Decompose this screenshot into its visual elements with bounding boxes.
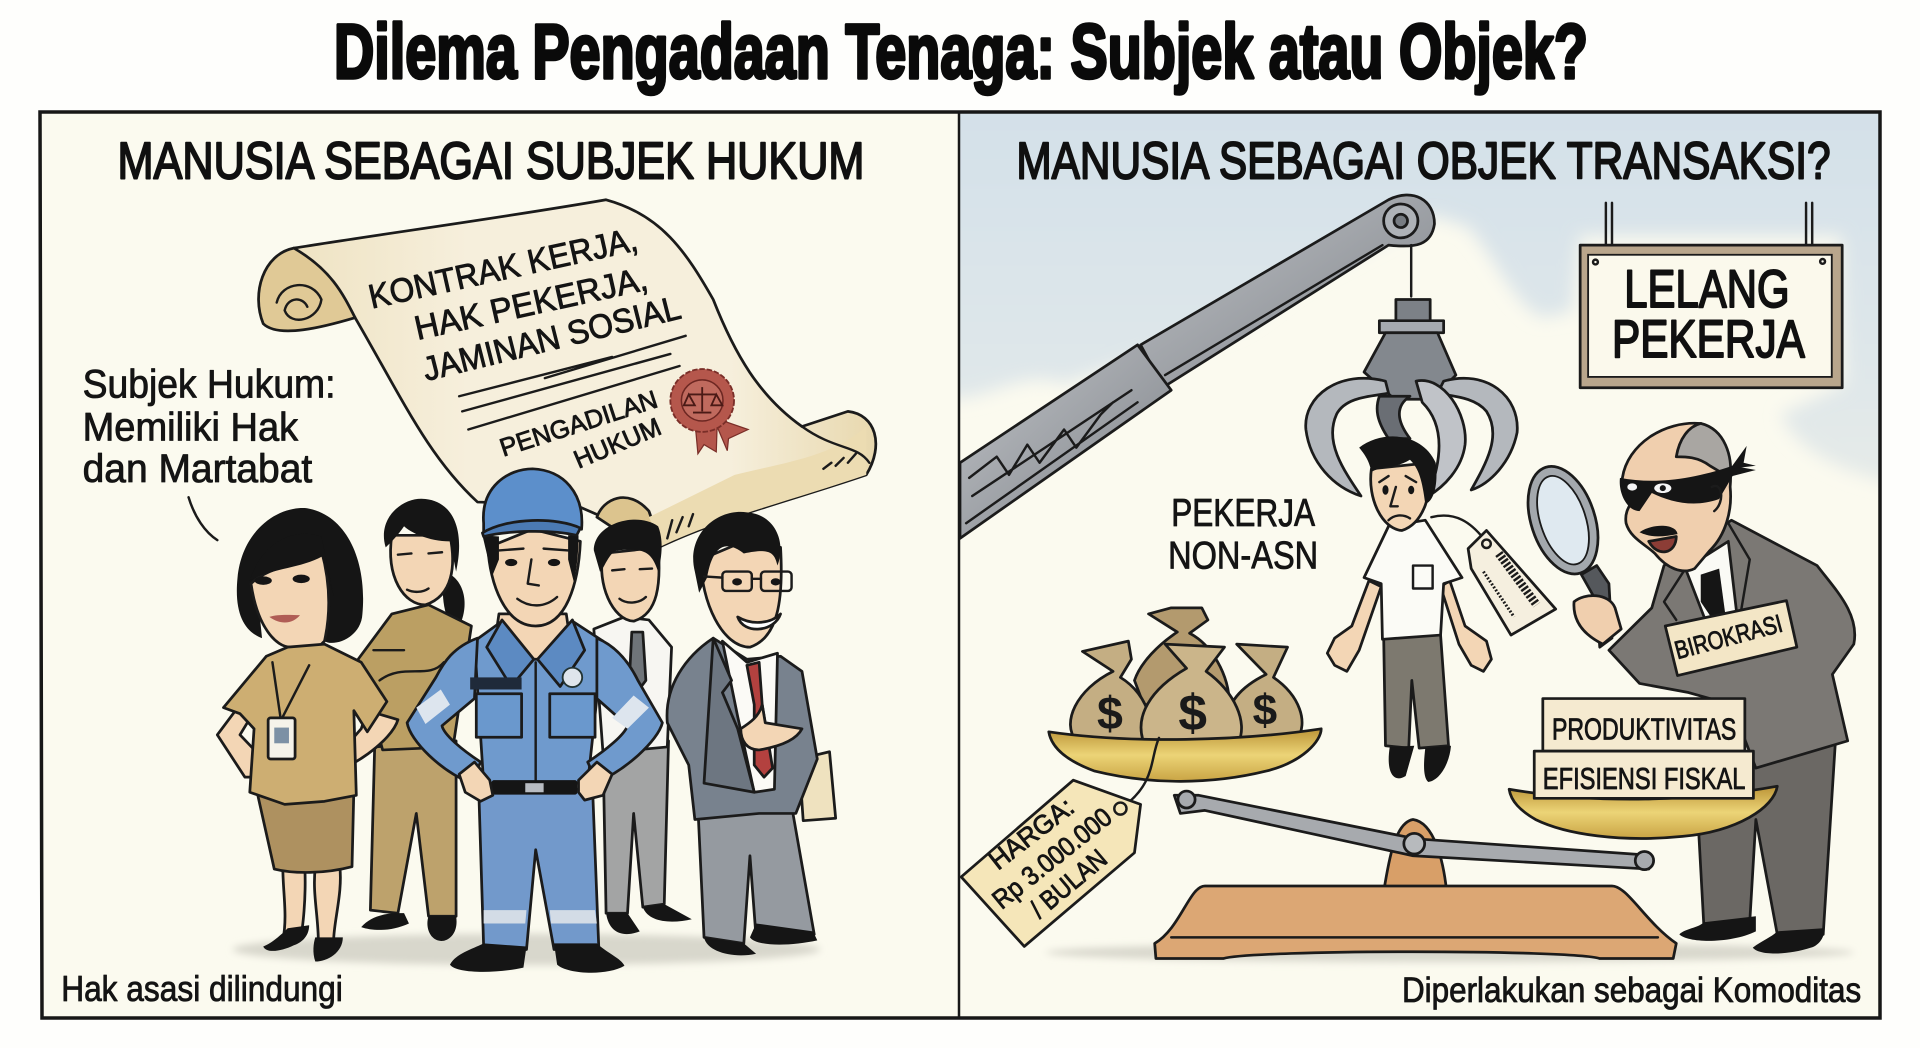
claw grabber: [1306, 245, 1517, 496]
sign lelang pekerja: PEKERJA: [1612, 310, 1805, 369]
speech label: dan Martabat: [83, 446, 312, 491]
caption right: Diperlakukan sebagai Komoditas: [1402, 971, 1861, 1010]
scroll document: [259, 200, 876, 546]
ground shadow right: [1046, 943, 1854, 962]
sign lelang pekerja: [1580, 203, 1842, 388]
panel: manusia sebagai subjek hukum: [40, 112, 960, 1018]
magnifying glass: [1515, 458, 1621, 647]
scroll document: JAMINAN SOSIAL: [419, 289, 685, 389]
money bags on pan: $: [1178, 684, 1207, 741]
label pekerja non-asn: PEKERJA: [1171, 492, 1315, 535]
scroll document: PENGADILAN: [496, 386, 661, 462]
birokrasi badge: BIROKRASI: [1672, 610, 1786, 665]
panel: manusia sebagai objek transaksi: [942, 100, 1903, 1018]
worker hanging: [1327, 436, 1556, 782]
scale base and beam: [1155, 791, 1676, 959]
money bags on pan: [1070, 608, 1302, 742]
label pekerja non-asn: [1168, 492, 1318, 578]
speech label: Memiliki Hak: [83, 405, 299, 449]
price tag: HARGA:: [983, 792, 1080, 876]
scroll document: HUKUM: [570, 413, 665, 474]
masked head: [1620, 423, 1756, 571]
price tag: [961, 738, 1159, 946]
price tag: / BULAN: [1024, 843, 1113, 924]
dollar signs: $: [1097, 687, 1123, 739]
panel heading left: MANUSIA SEBAGAI SUBJEK HUKUM: [118, 133, 864, 191]
bureaucrat masked figure: [1515, 423, 1855, 954]
seal: [670, 369, 748, 454]
label produktivitas: PRODUKTIVITAS: [1552, 713, 1736, 747]
label efisiensi fiskal: [1534, 751, 1753, 798]
caption left: Hak asasi dilindungi: [61, 968, 343, 1009]
left scale pan: [1049, 729, 1321, 781]
sign lelang pekerja: LELANG: [1624, 260, 1790, 319]
scroll text: KONTRAK KERJA,: [365, 221, 641, 316]
figure: man in grey suit with glasses: [667, 512, 836, 955]
figure: worker in blue uniform: [407, 469, 662, 973]
crane arm: [960, 195, 1434, 538]
sky wash: [942, 100, 1903, 487]
figure: woman in ponytail uniform: [358, 499, 471, 941]
label produktivitas: [1543, 699, 1745, 751]
figure: man in white shirt: [594, 520, 692, 934]
figure: woman with ID card: [217, 508, 398, 962]
speech label: Subjek Hukum:: [83, 362, 335, 406]
ground shadow: [233, 934, 820, 965]
price tag: Rp 3.000.000: [986, 802, 1118, 915]
speech label: [83, 362, 335, 540]
label pekerja non-asn: NON-ASN: [1168, 535, 1318, 578]
money bags on pan: $: [1253, 686, 1277, 735]
right scale pan with weights: [1509, 699, 1777, 838]
label efisiensi fiskal: EFISIENSI FISKAL: [1543, 762, 1745, 796]
barcode tag: [1468, 530, 1556, 635]
scroll document: HAK PEKERJA,: [411, 260, 651, 348]
